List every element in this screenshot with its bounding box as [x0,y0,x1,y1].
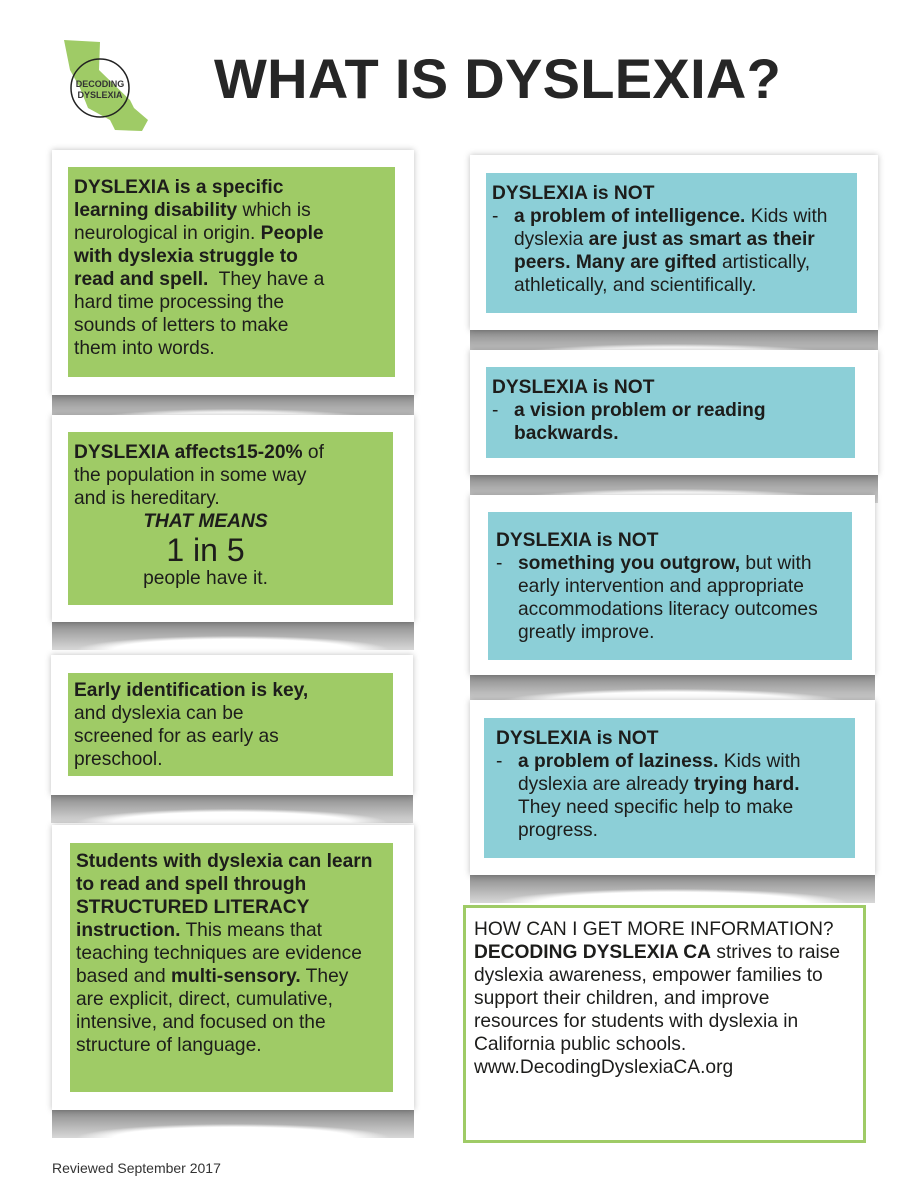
panel: not outgrow [470,495,875,675]
panel: structured literacy: based and multi-sensory. They [76,966,348,987]
footer text: Reviewed September 2017 [52,1160,221,1176]
panel: not intelligence [470,155,878,330]
logo [64,40,148,131]
panel: early identification: preschool. [74,749,163,770]
panel: early identification: Early identification is key, [74,680,308,701]
panel: more information: resources for students with dyslexia in [474,1011,798,1032]
panel: not intelligence: - [492,206,498,227]
panel: more information: California public schools. [474,1034,686,1055]
panel: not laziness: a problem of laziness. Kids with [518,751,801,772]
panel: not intelligence: a problem of intelligence. Kids with [514,206,827,227]
panel: definition: sounds of letters to make [74,315,288,336]
panel: not laziness: - [496,751,502,772]
panel: definition: neurological in origin. People [74,223,324,244]
panel: definition: DYSLEXIA is a specific [74,177,283,198]
panel: early identification [51,655,413,795]
panel: definition: learning disability which is [74,200,311,221]
panel: structured literacy: teaching techniques are evidence [76,943,362,964]
panel: not outgrow: early intervention and appropriate [518,576,804,597]
panel: not laziness: progress. [518,820,598,841]
panel: prevalence: THAT MEANS [143,511,268,532]
panel: not vision: backwards. [514,423,619,444]
panel: more information: www.DecodingDyslexiaCA.org [474,1057,733,1078]
panel: not outgrow: DYSLEXIA is NOT [496,530,658,551]
panel: early identification: screened for as early as [74,726,279,747]
panel: not intelligence: athletically, and scientifically. [514,275,756,296]
panel: structured literacy: structure of language. [76,1035,262,1056]
panel: definition [52,150,414,395]
panel: structured literacy [52,825,414,1110]
panel: not vision: DYSLEXIA is NOT [492,377,654,398]
panel: more information: dyslexia awareness, empower families to [474,965,823,986]
panel: structured literacy: to read and spell through [76,874,306,895]
logo: DYSLEXIA [77,90,123,100]
panel: not vision: a vision problem or reading [514,400,766,421]
panel: not intelligence: DYSLEXIA is NOT [492,183,654,204]
panel: structured literacy: instruction. This means that [76,920,322,941]
panel: prevalence [52,415,414,622]
panel: not intelligence: peers. Many are gifted artistically, [514,252,810,273]
panel: definition: read and spell. They have a [74,269,324,290]
panel: more information: support their children, and improve [474,988,769,1009]
panel: not vision [470,350,878,475]
panel: not outgrow: - [496,553,502,574]
panel: structured literacy: are explicit, direct, cumulative, [76,989,333,1010]
title: WHAT IS DYSLEXIA? [214,47,781,110]
panel: prevalence: people have it. [143,568,268,589]
panel: not outgrow: accommodations literacy outcomes [518,599,818,620]
panel: more information: DECODING DYSLEXIA CA strives to raise [474,942,840,963]
panel: not laziness [470,700,875,875]
panel: not laziness: DYSLEXIA is NOT [496,728,658,749]
panel: prevalence: and is hereditary. [74,488,220,509]
panel: more information [463,905,866,1143]
panel: not laziness: They need specific help to make [518,797,793,818]
panel: prevalence: DYSLEXIA affects15-20% of [74,442,324,463]
panel: prevalence: 1 in 5 [166,532,245,568]
panel: not outgrow: greatly improve. [518,622,654,643]
panel: not intelligence: dyslexia are just as smart as their [514,229,815,250]
panel: structured literacy: Students with dyslexia can learn [76,851,372,872]
panel: definition: them into words. [74,338,215,359]
panel: structured literacy: intensive, and focused on the [76,1012,326,1033]
panel: prevalence: the population in some way [74,465,307,486]
panel: not laziness: dyslexia are already trying hard. [518,774,800,795]
panel: structured literacy: STRUCTURED LITERACY [76,897,309,918]
panel: not outgrow: something you outgrow, but with [518,553,812,574]
panel: definition: hard time processing the [74,292,284,313]
panel: early identification: and dyslexia can be [74,703,244,724]
panel: not vision: - [492,400,498,421]
logo: DECODING [76,79,124,89]
panel: more information: HOW CAN I GET MORE INFORMATION? [474,919,834,940]
panel: definition: with dyslexia struggle to [74,246,298,267]
